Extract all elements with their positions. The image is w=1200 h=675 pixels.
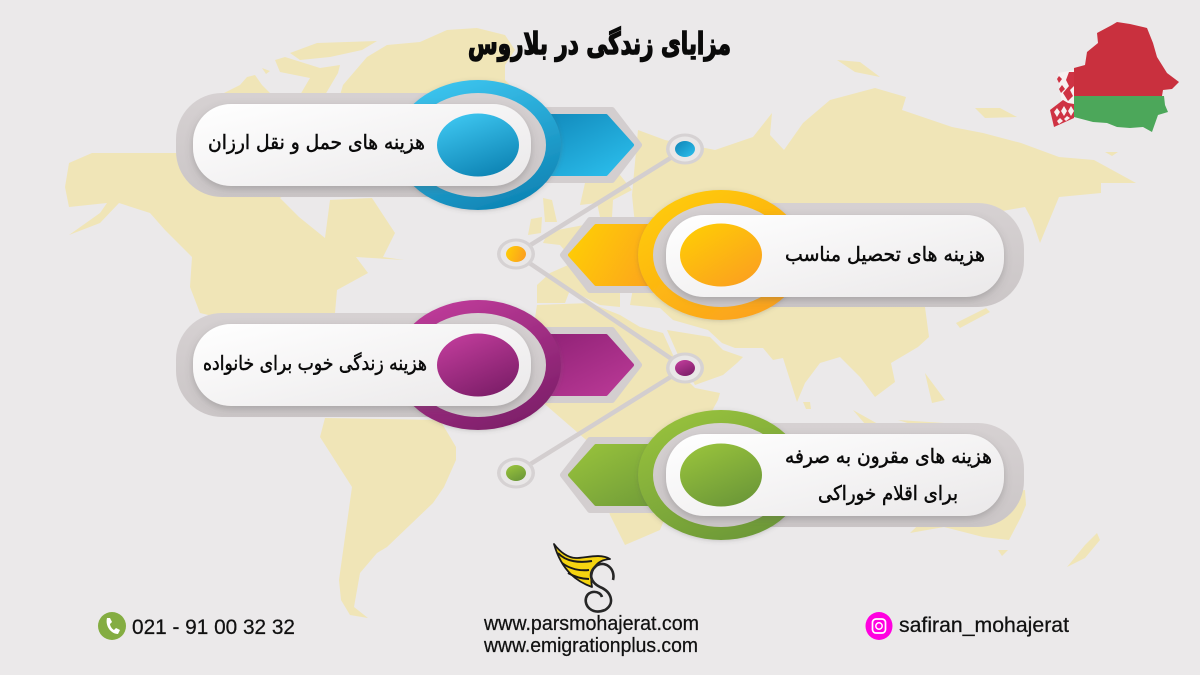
green arrow tab	[563, 440, 680, 510]
blue circle	[437, 114, 519, 176]
new zealand and tasmania	[998, 533, 1100, 567]
contact: phone	[98, 612, 295, 640]
northern islands	[837, 60, 1118, 156]
eurasia	[630, 88, 1136, 402]
british isles	[528, 198, 557, 235]
world map background	[65, 28, 1136, 618]
website 1: www.parsmohajerat.com	[483, 613, 699, 635]
website 2: www.emigrationplus.com	[483, 635, 698, 657]
icon: phone	[98, 612, 126, 640]
panel: education costs	[563, 190, 1024, 320]
title: مزایای زندگی در بلاروس	[468, 26, 731, 62]
australia	[910, 490, 1026, 540]
yellow arrow tab	[563, 220, 680, 290]
instagram handle: safiran_mohajerat	[899, 614, 1069, 637]
south america	[320, 418, 456, 618]
belarus flag map	[1050, 22, 1179, 132]
icon: instagram	[866, 612, 892, 640]
phone number: 021 - 91 00 32 32	[132, 616, 295, 639]
japan	[956, 308, 990, 328]
label: هزینه زندگی خوب برای خانواده	[203, 351, 427, 375]
panel: transport costs	[176, 80, 639, 210]
panel: family living costs	[176, 300, 639, 430]
connector lines	[497, 134, 704, 488]
green circle	[680, 444, 762, 506]
red region	[1074, 22, 1179, 96]
node 1	[666, 134, 704, 164]
contact: websites	[483, 613, 699, 657]
label line 1: هزینه های مقرون به صرفه	[785, 444, 992, 468]
node 4	[497, 458, 535, 488]
label line 2: برای اقلام خوراکی	[818, 481, 958, 505]
western europe	[537, 222, 620, 307]
node 2	[497, 238, 535, 270]
arabia	[667, 330, 743, 385]
node 3	[666, 352, 704, 384]
arctic islands	[220, 41, 377, 95]
company logo	[554, 544, 613, 611]
label: هزینه های تحصیل مناسب	[785, 242, 985, 266]
s swirl	[586, 564, 613, 611]
label: هزینه های حمل و نقل ارزان	[208, 130, 425, 154]
scandinavia	[580, 175, 632, 217]
panel: food costs	[563, 410, 1024, 540]
purple circle	[437, 334, 519, 396]
greenland	[340, 28, 520, 95]
green region	[1074, 96, 1168, 132]
north america	[65, 120, 404, 325]
africa	[530, 303, 720, 545]
ornament band	[1050, 70, 1074, 127]
purple arrow tab	[520, 330, 639, 400]
yellow circle	[680, 224, 762, 286]
contact: instagram	[866, 612, 1069, 640]
wing	[554, 544, 610, 587]
blue arrow tab	[520, 110, 639, 180]
south east asia islands	[803, 373, 960, 430]
